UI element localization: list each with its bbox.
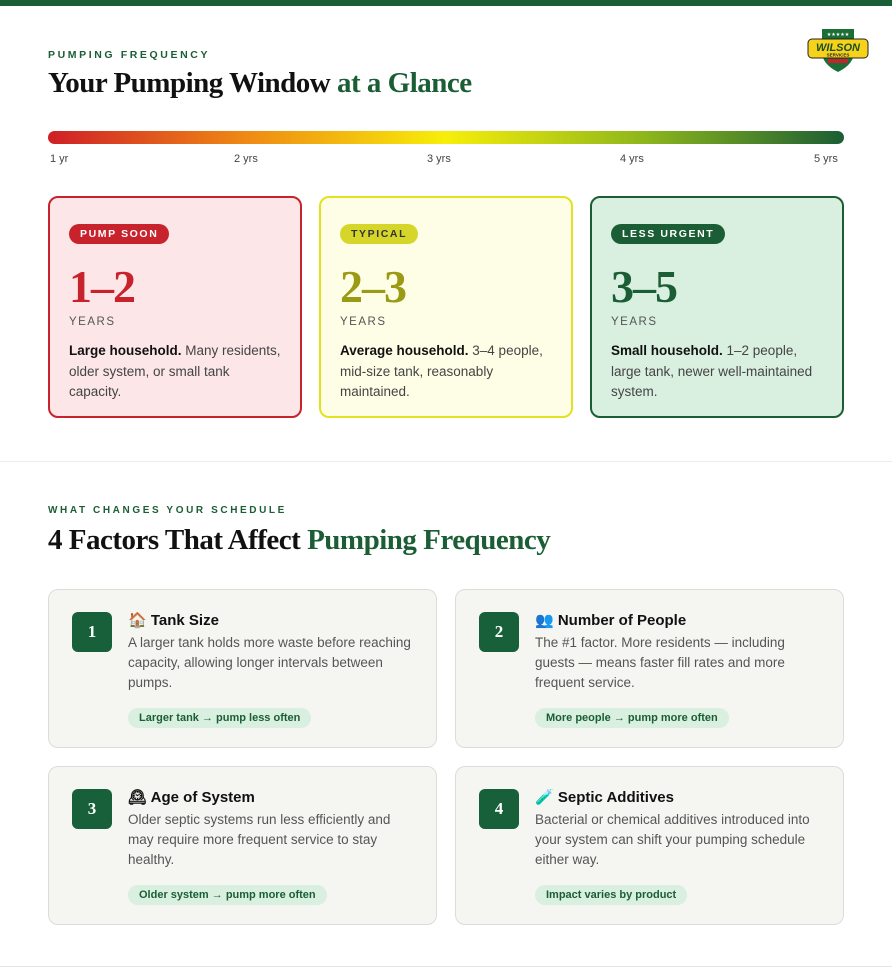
factor 3: 3	[88, 799, 96, 818]
factor 2: 👥 Number of People	[535, 612, 686, 629]
factor 2: More people → pump more often	[546, 712, 718, 724]
factor 4: 🧪 Septic Additives	[535, 789, 674, 806]
scale labels: 5 yrs	[814, 153, 838, 165]
card: pump soon: Large household. Many residents, older system, or small tank capacity.	[69, 343, 281, 399]
factor 1	[48, 589, 437, 748]
card: pump soon: 1–2	[69, 261, 135, 312]
card: pump soon	[48, 196, 302, 418]
factor 2: The #1 factor. More residents — including guests — means faster fill rates and more frequent service.	[535, 635, 785, 690]
card: typical	[319, 196, 573, 418]
gradient scale bar	[48, 131, 844, 144]
logo: SERVICES	[827, 52, 849, 58]
factor 2: 2	[495, 622, 503, 641]
logo: WILSON	[816, 42, 861, 54]
scale labels: 2 yrs	[234, 153, 258, 165]
card: less urgent: Small household. 1–2 people, large tank, newer well-maintained system.	[611, 343, 812, 399]
card: typical: TYPICAL	[351, 228, 407, 240]
factor 3: Older system → pump more often	[139, 889, 316, 901]
factor 4	[455, 766, 844, 925]
eyebrow: what changes: WHAT CHANGES YOUR SCHEDULE	[48, 505, 287, 516]
card: less urgent	[590, 196, 844, 418]
factor 3: 🕰 Age of System	[128, 789, 255, 806]
card: less urgent: LESS URGENT	[622, 228, 714, 240]
factor 1: 🏠 Tank Size	[128, 612, 219, 629]
factor 1: 1	[88, 622, 96, 641]
title: 4 factors: 4 Factors That Affect Pumping Frequency	[48, 524, 550, 556]
card: pump soon: YEARS	[69, 316, 116, 328]
scale labels: 1 yr	[50, 153, 68, 165]
card: typical: Average household. 3–4 people, mid-size tank, reasonably maintained.	[340, 343, 543, 399]
card: less urgent: 3–5	[611, 261, 677, 312]
card: pump soon: PUMP SOON	[80, 228, 158, 240]
factor 2	[455, 589, 844, 748]
factor 4: 4	[495, 799, 503, 818]
eyebrow: pumping frequency: PUMPING FREQUENCY	[48, 49, 210, 61]
factor 4: Impact varies by product	[546, 889, 676, 901]
scale labels: 4 yrs	[620, 153, 644, 165]
card: less urgent: YEARS	[611, 316, 658, 328]
factor 3	[48, 766, 437, 925]
logo: ★★★★★	[827, 32, 850, 38]
factor 3: Older septic systems run less efficiently and may require more frequent service to stay healthy.	[128, 812, 390, 867]
scale labels	[50, 153, 838, 165]
scale labels: 3 yrs	[427, 153, 451, 165]
card: typical: YEARS	[340, 316, 386, 328]
title: Your Pumping Window at a Glance	[48, 67, 472, 99]
logo	[808, 29, 868, 72]
factor 1: A larger tank holds more waste before reaching capacity, allowing longer intervals between pumps.	[128, 635, 411, 690]
factor 1: Larger tank → pump less often	[139, 712, 300, 724]
card: typical: 2–3	[340, 261, 406, 312]
factor 4: Bacterial or chemical additives introduced into your system can shift your pumping schedule either way.	[535, 812, 810, 867]
